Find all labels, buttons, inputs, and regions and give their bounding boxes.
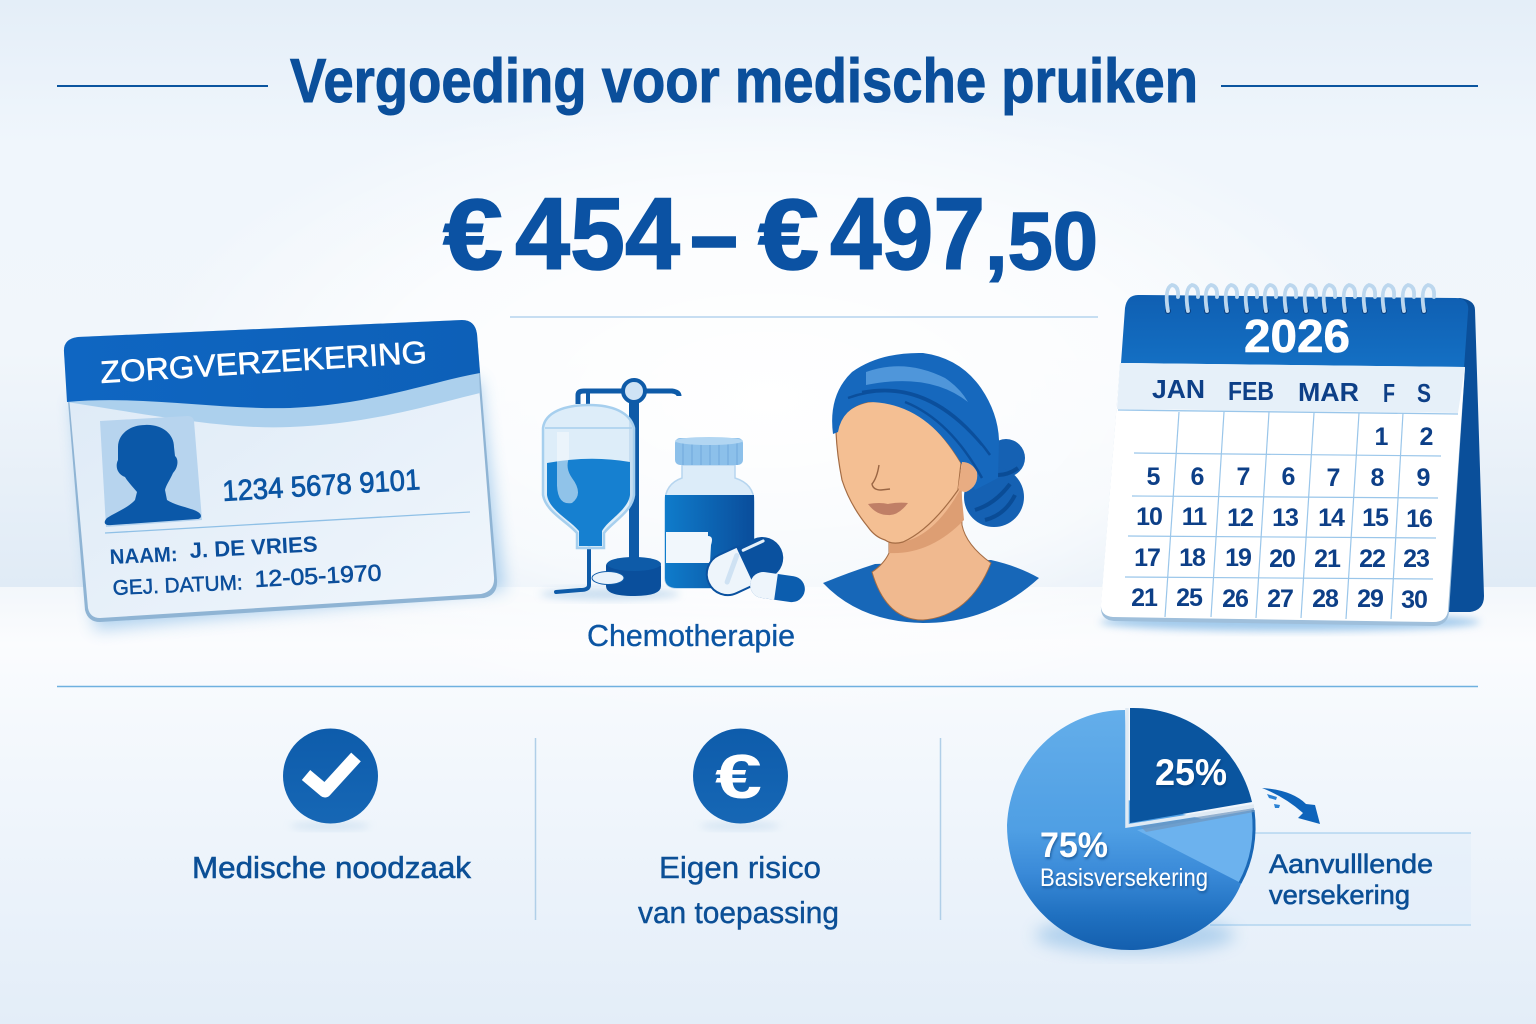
date numbers: 16 — [1406, 505, 1432, 533]
date numbers: 10 — [1136, 503, 1162, 531]
card details: NAAM: — [109, 543, 178, 569]
item: medische noodzaak: Medische noodzaak — [192, 850, 472, 885]
spiral rings — [1165, 285, 1434, 314]
bun — [964, 439, 1025, 527]
price range: € — [443, 179, 503, 291]
date numbers: 6 — [1282, 463, 1295, 491]
large capsule — [700, 530, 790, 602]
illustration: woman with headscarf — [823, 353, 1039, 623]
label: aanvullende verzekering: Aanvulllende — [1269, 849, 1433, 879]
date numbers: 20 — [1269, 545, 1295, 573]
card photo silhouette — [100, 416, 202, 527]
price range: € — [758, 179, 819, 291]
date numbers: 7 — [1237, 463, 1250, 491]
label: aanvullende verzekering: versekering — [1269, 880, 1410, 910]
face — [836, 401, 961, 543]
small capsule — [748, 570, 807, 604]
date numbers: 5 — [1147, 463, 1161, 491]
card details: 12-05-1970 — [254, 559, 382, 592]
price range: ,50 — [985, 196, 1098, 287]
date numbers: 6 — [1191, 463, 1204, 491]
date numbers: 1 — [1375, 423, 1389, 451]
bag — [543, 405, 634, 548]
slice: 25 percent — [1127, 708, 1254, 832]
date numbers: 26 — [1222, 585, 1248, 613]
date numbers: 29 — [1357, 585, 1383, 613]
date numbers: 19 — [1225, 544, 1251, 572]
price range — [443, 177, 1098, 291]
label: 75 percent: Basisversekering — [1040, 864, 1208, 892]
title: Vergoeding voor medische pruiken — [290, 47, 1198, 116]
nose and lips — [868, 465, 908, 515]
item: eigen risico — [638, 728, 839, 930]
icon: calendar — [1100, 285, 1484, 631]
month labels: F — [1383, 378, 1395, 408]
date numbers: 27 — [1267, 585, 1293, 613]
icon: euro — [693, 728, 788, 824]
shirt — [823, 560, 1039, 623]
item: eigen risico: Eigen risico — [659, 850, 821, 885]
calendar header: 2026 — [1244, 310, 1350, 362]
card number: 1234 5678 9101 — [222, 464, 421, 508]
price range: 454 — [515, 177, 680, 291]
price range: 497 — [830, 177, 985, 291]
date numbers: 22 — [1359, 545, 1385, 573]
month labels: S — [1417, 378, 1431, 408]
card header — [64, 320, 480, 427]
price range: – — [690, 179, 738, 291]
pie chart — [1007, 708, 1254, 953]
card header: ZORGVERZEKERING — [99, 335, 428, 390]
date numbers: 7 — [1327, 464, 1340, 492]
date numbers: 25 — [1176, 584, 1203, 612]
label: 75 percent: 75% — [1040, 826, 1108, 865]
date numbers: 14 — [1318, 504, 1345, 532]
date numbers: 23 — [1403, 545, 1429, 573]
item: medische noodzaak — [192, 728, 472, 885]
date numbers: 15 — [1362, 504, 1389, 532]
date numbers: 11 — [1182, 503, 1207, 531]
neck — [872, 485, 991, 620]
item: eigen risico: van toepassing — [638, 895, 839, 930]
month labels — [1152, 374, 1431, 408]
date numbers: 13 — [1272, 504, 1298, 532]
calendar header — [1121, 295, 1468, 368]
slice: light wedge — [1137, 810, 1254, 882]
date numbers: 28 — [1312, 585, 1339, 613]
month labels: FEB — [1228, 376, 1274, 406]
arrow — [1262, 788, 1320, 824]
date numbers: 17 — [1134, 544, 1160, 572]
date numbers: 12 — [1227, 504, 1253, 532]
date numbers: 9 — [1417, 464, 1430, 492]
card details: J. DE VRIES — [189, 531, 318, 563]
month labels: MAR — [1298, 377, 1359, 407]
date numbers: 8 — [1371, 464, 1385, 492]
headscarf — [832, 353, 999, 490]
stand — [556, 380, 679, 596]
date numbers: 2 — [1420, 423, 1433, 451]
date numbers: 21 — [1314, 545, 1341, 573]
date numbers: 21 — [1131, 584, 1158, 612]
date numbers: 30 — [1401, 586, 1427, 614]
card details — [109, 531, 382, 600]
icon: check mark — [283, 728, 378, 824]
ear — [958, 462, 977, 492]
label: aanvullende verzekering — [1210, 833, 1471, 925]
insurance card — [64, 320, 505, 630]
month labels: JAN — [1152, 374, 1205, 404]
icon: medicine bottle and capsules — [665, 437, 807, 604]
icon: IV bag and stand — [540, 380, 680, 600]
label: chemotherapie: Chemotherapie — [587, 618, 795, 653]
slice: 25 percent: 25% — [1155, 752, 1227, 793]
icon: euro: € — [715, 743, 762, 812]
date numbers — [1131, 423, 1433, 614]
calendar back panel — [1440, 298, 1484, 612]
card details: GEJ. DATUM: — [112, 571, 243, 600]
label: 75 percent — [1040, 826, 1208, 892]
calendar page — [1101, 363, 1465, 626]
date numbers: 18 — [1179, 544, 1206, 572]
